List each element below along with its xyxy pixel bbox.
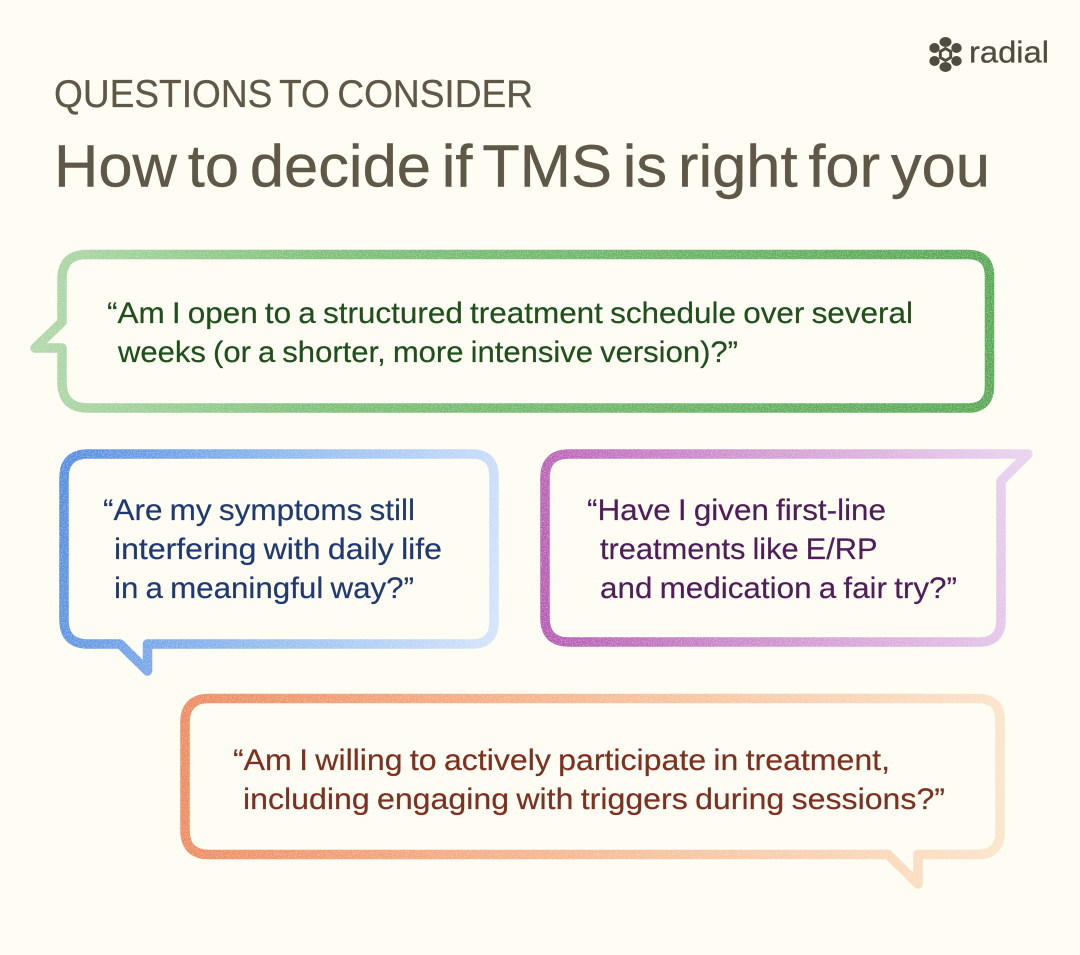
logo: radial [929, 34, 1049, 72]
purple bubble text: “Have I given first-line [587, 494, 886, 527]
speech bubble: purple, first-line treatments [545, 454, 1028, 642]
orange bubble text: “Am I willing to actively participate in treatment, [233, 744, 890, 777]
blue bubble text: interfering with daily life [114, 533, 442, 566]
speech bubble: blue, symptoms [64, 454, 494, 671]
orange bubble outline [185, 698, 1000, 884]
eyebrow heading: QUESTIONS TO CONSIDER [54, 73, 533, 116]
purple bubble outline [545, 454, 1028, 642]
blue bubble outline [64, 454, 494, 671]
purple bubble text: treatments like E/RP [600, 533, 877, 566]
speech bubble: orange, active participation [185, 698, 1000, 884]
blue bubble text: in a meaningful way?” [114, 572, 414, 605]
green bubble text: “Am I open to a structured treatment schedule over several [107, 297, 913, 330]
title: How to decide if TMS is right for you [54, 134, 990, 200]
green bubble outline [35, 254, 990, 408]
icon: flower mark [929, 37, 962, 72]
orange bubble text: including engaging with triggers during sessions?” [243, 783, 945, 816]
logo wordmark: radial [969, 34, 1049, 70]
blue bubble text: “Are my symptoms still [103, 494, 415, 527]
green bubble text: weeks (or a shorter, more intensive version)?” [117, 336, 738, 369]
speech bubble: green, structured schedule [35, 254, 990, 408]
purple bubble text: and medication a fair try?” [600, 572, 957, 605]
